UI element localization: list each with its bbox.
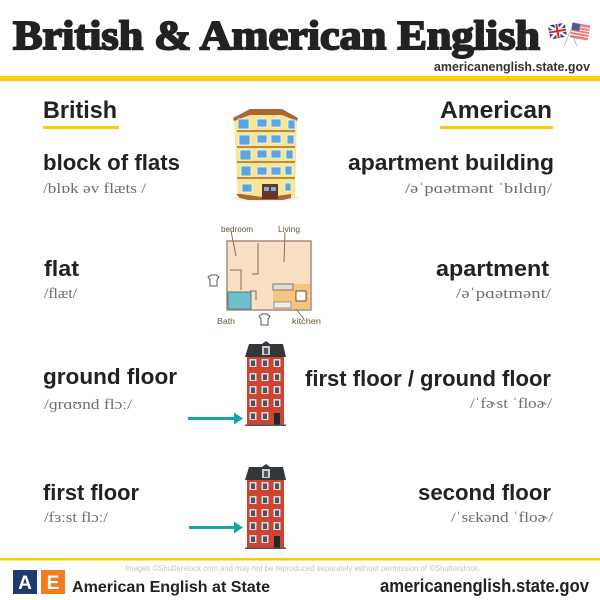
row 2 American (436, 256, 552, 302)
row 4 British: /fɜːst flɔː/ (44, 510, 109, 526)
row 4 British (43, 480, 139, 526)
source url top: americanenglish.state.gov (434, 59, 591, 74)
row 4 American (418, 480, 554, 526)
row 2 American: apartment (436, 256, 550, 281)
icon: floor plan: Living (278, 225, 300, 234)
row 4 American: second floor (418, 480, 551, 505)
bottom divider (0, 558, 600, 560)
row 4 British: first floor (43, 480, 139, 505)
footer brand name: American English at State (72, 579, 270, 596)
icon: floor plan: bedroom (221, 225, 253, 234)
row 2 British: flat (44, 256, 80, 281)
row 1 American: apartment building (348, 150, 554, 175)
heading: British: British (43, 97, 117, 124)
icon: floor plan: Bath (217, 317, 235, 326)
icon: apartment block (230, 109, 300, 201)
arrow: ground floor (188, 412, 243, 424)
footer url: americanenglish.state.gov (380, 576, 589, 596)
top divider (0, 76, 600, 81)
row 3 British: ground floor (43, 364, 177, 389)
row 3 British (43, 364, 177, 413)
heading: American: American (440, 97, 552, 124)
row 4 American: /ˈsɛkənd ˈfloɚ/ (451, 510, 554, 526)
logo: AE: A (18, 573, 32, 594)
icon: crossed UK and US flags (548, 23, 590, 46)
image credit: Images ©Shutterstock.com and may not be reproduced separately without permission of ©Shutterstock. (125, 563, 480, 573)
row 1 British: block of flats (43, 150, 180, 175)
title: British & American English (13, 12, 540, 58)
icon: red building, ground floor (245, 341, 286, 426)
icon: red building, first floor (245, 464, 286, 549)
row 1 American (348, 150, 554, 197)
arrow: first floor (189, 522, 243, 534)
row 3 American: first floor / ground floor (305, 366, 551, 391)
row 3 British: /ɡrɑʊnd flɔː/ (44, 397, 133, 413)
row 1 American: /əˈpɑətmənt ˈbɪldɪŋ/ (405, 181, 553, 197)
row 2 British: /flæt/ (44, 286, 78, 302)
row 3 American: /ˈfɚst ˈfloɚ/ (470, 396, 553, 412)
logo: AE: E (47, 573, 59, 594)
row 1 British: /blɒk əv flæts / (43, 181, 147, 197)
row 2 British (44, 256, 80, 302)
icon: floor plan (208, 225, 321, 326)
icon: floor plan: kitchen (292, 317, 321, 326)
row 2 American: /əˈpɑətmənt/ (456, 286, 552, 302)
row 1 British (43, 150, 180, 197)
row 3 American (305, 366, 553, 412)
logo: AE (13, 570, 65, 594)
